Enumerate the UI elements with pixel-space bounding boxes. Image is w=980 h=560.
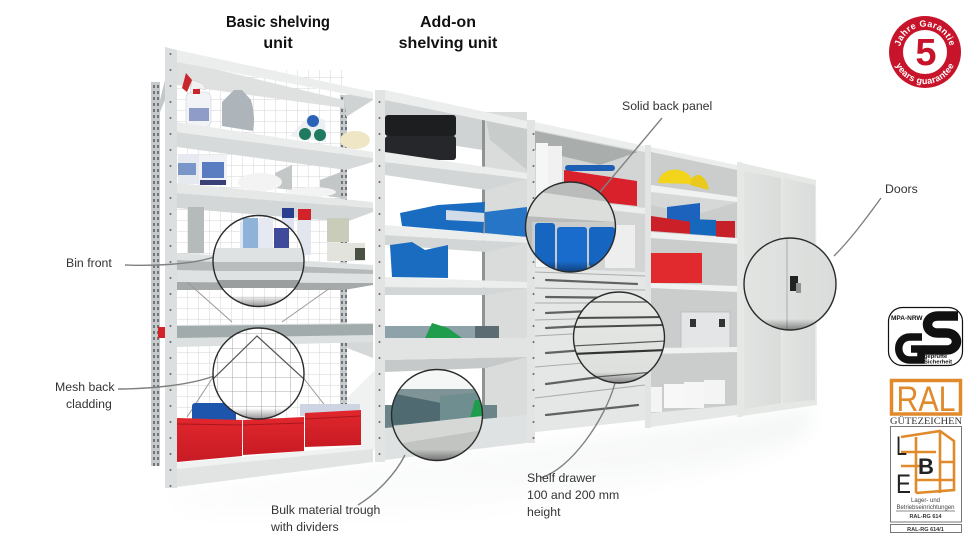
magnifier: bulk trough [391, 369, 483, 462]
fourth unit [645, 145, 737, 428]
shelf 1 [177, 122, 373, 158]
badge: 5 years guarantee [889, 16, 961, 88]
roll packs [290, 115, 326, 142]
badge: 5 years guarantee: years guarantee [894, 62, 954, 86]
shelving rack [151, 47, 817, 488]
spray cans [282, 208, 365, 261]
shelf 4 [177, 323, 373, 347]
shelf edge [600, 203, 645, 214]
basic shelving unit [151, 47, 375, 488]
floor reflection [170, 409, 818, 525]
logo: LBE: Lager- und [911, 498, 940, 504]
label: bin front: Bin front [66, 256, 112, 270]
leader lines [118, 118, 881, 505]
side panel [483, 112, 527, 442]
heading: add-on shelving unit: Add-on [420, 14, 476, 31]
blue bins [390, 202, 527, 278]
rear upright right [340, 95, 347, 430]
red crate [564, 165, 637, 206]
magnifier: solid back panel [525, 182, 616, 274]
blue box [192, 403, 236, 425]
red crates [177, 410, 361, 462]
label: bulk material trough: Bulk material trough [271, 503, 381, 517]
rear upright left [151, 82, 160, 466]
door cabinet [737, 162, 817, 417]
aluminium case [681, 312, 730, 348]
magnifier: doors [743, 237, 837, 331]
label: solid back panel: Solid back panel [622, 99, 712, 113]
shelf 5 bottom [177, 445, 373, 487]
white rolls [238, 173, 282, 191]
logo: LBE: B [918, 454, 934, 479]
dividers in bin [188, 207, 204, 253]
yellowish rolls [340, 131, 370, 149]
shelf 3 bin front [177, 253, 373, 283]
paint cans [178, 154, 227, 185]
label: mesh back cladding: Mesh back [55, 380, 115, 394]
logo: RAL-RG 614/1 box: RAL-RG 614/1 [907, 527, 944, 533]
centre upright [375, 90, 385, 462]
black cases [385, 115, 456, 160]
magnifier: drawer [572, 291, 666, 385]
trough lower back [385, 405, 497, 431]
label: mesh back cladding: cladding [66, 397, 112, 411]
front left upright [165, 47, 177, 488]
white buckets [651, 380, 725, 412]
label clip red [158, 327, 165, 338]
spray bottle [182, 73, 211, 127]
logo: GS mark: Sicherheit [924, 360, 952, 366]
blue and red bins [651, 203, 735, 238]
jug [222, 90, 254, 131]
logo: GS mark: MPA-NRW [891, 315, 923, 322]
drawer unit [527, 120, 645, 443]
red crate [651, 253, 702, 283]
heading: basic shelving unit: Basic shelving [226, 14, 330, 31]
trough back [385, 323, 499, 339]
logo: RAL: RAL [896, 380, 956, 419]
logo: LBE: E [896, 469, 911, 499]
badge: 5 years guarantee: Jahre Garantie [894, 20, 954, 46]
logo: LBE: L [896, 431, 907, 461]
magnifier: bin front [212, 215, 305, 308]
yellow helmets [658, 170, 709, 190]
shelves [385, 152, 527, 179]
logo: RAL: GÜTEZEICHEN [890, 415, 962, 427]
upright [645, 145, 651, 428]
logo: RAL-RG 614/1 box [890, 524, 962, 533]
label: shelf drawer: height [527, 505, 561, 519]
shelf 2 [177, 183, 373, 208]
upright [527, 120, 535, 443]
logo: LBE: RAL-RG 614 [909, 514, 942, 520]
label: shelf drawer: Shelf drawer [527, 471, 596, 485]
heading: basic shelving unit: unit [263, 35, 293, 52]
white boxes [605, 225, 635, 268]
add-on shelving unit [375, 90, 527, 462]
label: bulk material trough: with dividers [270, 520, 339, 534]
logo: GS mark [888, 308, 962, 366]
logo: GS mark: geprüfte [924, 354, 948, 360]
badge: 5 years guarantee: 5 [915, 32, 937, 74]
white panels [536, 143, 562, 267]
label: doors: Doors [885, 182, 918, 196]
shelves [651, 185, 737, 202]
magnifier: mesh back [212, 328, 305, 421]
mesh back cladding panel [177, 70, 344, 445]
heading: add-on shelving unit: shelving unit [399, 35, 498, 52]
logo: LBE [890, 426, 962, 522]
drawer fronts [535, 268, 645, 432]
dividers [275, 165, 292, 190]
logo: LBE: Betriebseinrichtungen [896, 505, 955, 511]
label: shelf drawer: 100 and 200 mm [527, 488, 619, 502]
